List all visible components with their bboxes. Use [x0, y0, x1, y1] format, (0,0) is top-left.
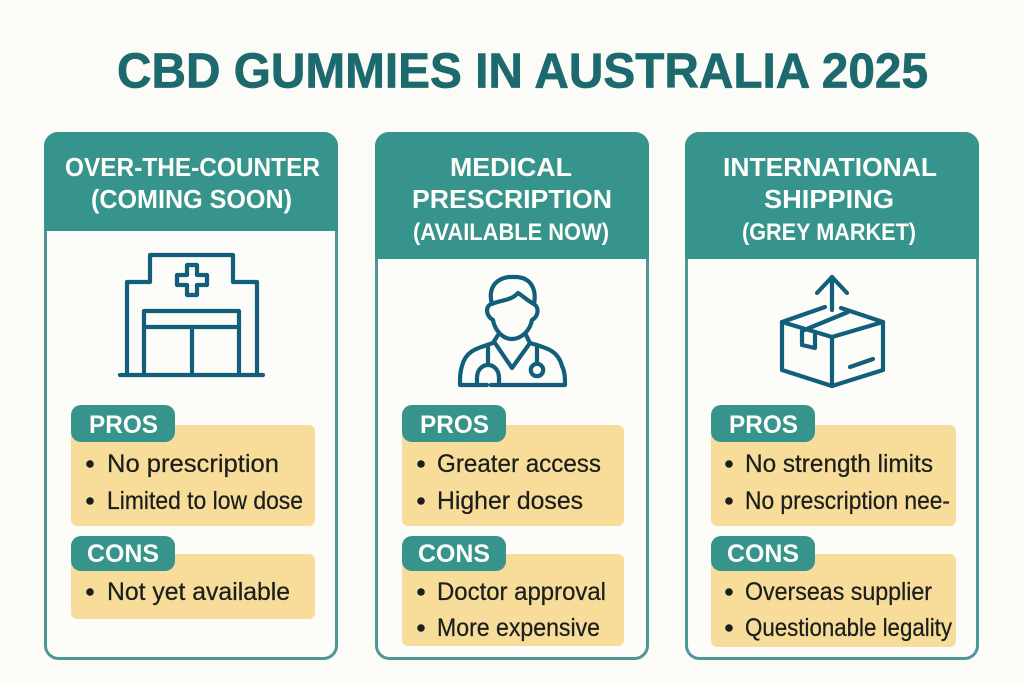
pros: over-the-counter [71, 405, 315, 526]
pros: international shipping: PROS [729, 411, 798, 439]
pros: medical prescription: Greater access [437, 450, 601, 478]
cons: international shipping: Questionable legality [745, 614, 952, 642]
pros: over-the-counter: Limited to low dose [107, 487, 303, 515]
panel: international shipping [685, 132, 979, 658]
pros: over-the-counter: No prescription [107, 450, 279, 478]
pros: medical prescription [402, 405, 624, 526]
icon: parcel with up arrow [782, 277, 883, 386]
cons: international shipping: CONS [727, 540, 799, 568]
header: international shipping: (GREY MARKET) [742, 219, 916, 246]
panel: medical prescription [375, 132, 649, 658]
icon: pharmacy storefront [120, 255, 263, 375]
header: international shipping: INTERNATIONAL [723, 152, 937, 182]
cons: international shipping: Overseas supplier [745, 578, 932, 606]
cons: international shipping [711, 536, 956, 647]
pros: medical prescription: Higher doses [437, 487, 583, 515]
header: over-the-counter [44, 132, 338, 231]
header: over-the-counter: OVER-THE-COUNTER [65, 152, 320, 182]
icon: doctor [460, 277, 565, 385]
pros: international shipping: No strength limits [745, 450, 933, 478]
pros: international shipping [711, 405, 956, 526]
header: over-the-counter: (COMING SOON) [91, 184, 292, 214]
header: medical prescription: PRESCRIPTION [412, 184, 612, 214]
cons: over-the-counter [71, 536, 315, 619]
cons: over-the-counter: CONS [87, 540, 159, 568]
cons: medical prescription [402, 536, 624, 646]
pros: over-the-counter: PROS [89, 411, 158, 439]
pros: international shipping: No prescription nee- [745, 487, 950, 515]
header: medical prescription: MEDICAL [450, 152, 572, 182]
pros: medical prescription: PROS [420, 411, 489, 439]
header: medical prescription [375, 132, 649, 259]
cons: medical prescription: Doctor approval [437, 578, 606, 606]
header: international shipping [685, 132, 979, 259]
panel: over-the-counter [44, 132, 338, 658]
cons: over-the-counter: Not yet available [107, 578, 290, 606]
cons: medical prescription: CONS [418, 540, 490, 568]
title: CBD GUMMIES IN AUSTRALIA 2025 [117, 44, 928, 98]
header: international shipping: SHIPPING [764, 184, 894, 214]
cons: medical prescription: More expensive [437, 614, 600, 642]
header: medical prescription: (AVAILABLE NOW) [413, 219, 609, 246]
